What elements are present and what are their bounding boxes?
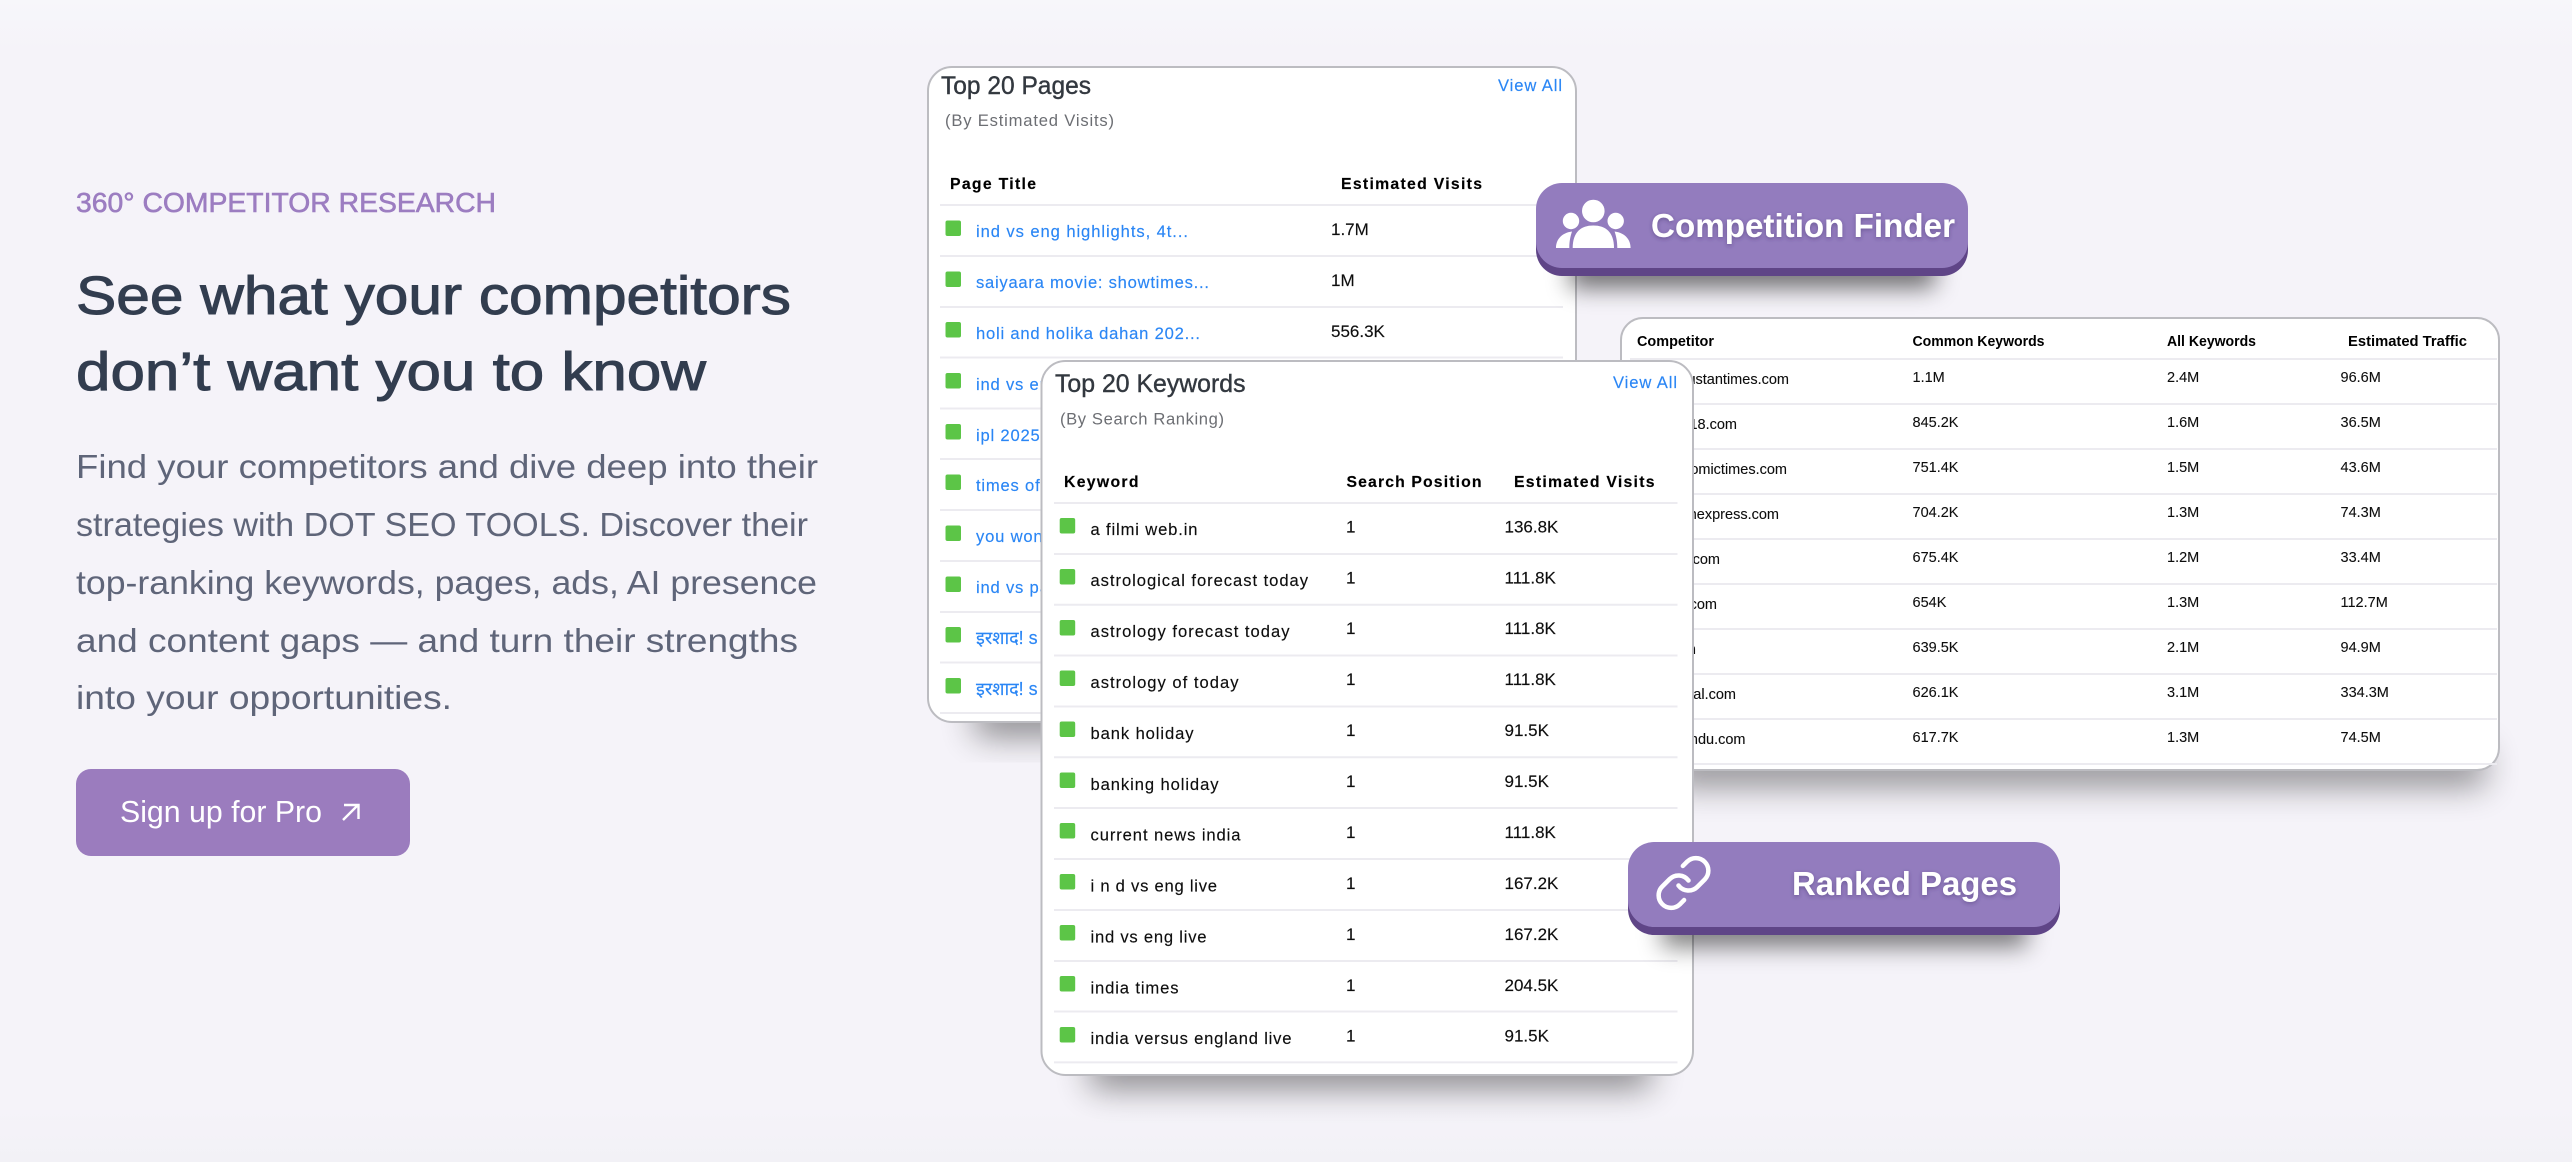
row 1 bbox=[1054, 518, 1678, 554]
row 6: banking holiday bbox=[1090, 775, 1219, 794]
row 3: 111.8K bbox=[1504, 619, 1557, 638]
row 2 bbox=[1054, 568, 1678, 605]
badge: ranked pages bbox=[1628, 842, 2060, 947]
row 2: saiyaara movie: showtimes... bbox=[976, 273, 1209, 292]
row 2: astrological forecast today bbox=[1090, 571, 1309, 590]
row 4: 111.8K bbox=[1504, 670, 1557, 689]
row 10: इरशाद! s bbox=[976, 679, 1038, 699]
row 11: 91.5K bbox=[1504, 1026, 1550, 1046]
row 1 bbox=[1630, 370, 2497, 404]
icon: people bbox=[1556, 200, 1631, 248]
icon: arrow bbox=[343, 805, 358, 820]
row 5 bbox=[1054, 721, 1678, 757]
row 6: 91.5K bbox=[1504, 772, 1550, 791]
row 2: 1 bbox=[1346, 568, 1355, 588]
badge label: Competition Finder bbox=[1651, 207, 1955, 244]
button: sign up for pro: Sign up for Pro bbox=[120, 794, 322, 829]
table header: Search Position bbox=[1346, 474, 1482, 491]
row 6 bbox=[940, 474, 1563, 510]
row 10 bbox=[940, 678, 1563, 713]
row 4 bbox=[1054, 670, 1678, 706]
row 3: 556.3K bbox=[1331, 322, 1386, 341]
heading: See what your competitors bbox=[76, 266, 791, 326]
row 11: 1 bbox=[1346, 1026, 1355, 1046]
heading bbox=[76, 266, 791, 402]
badge base bbox=[1628, 850, 2060, 935]
table header bbox=[940, 176, 1563, 205]
row 2: 1.6M bbox=[2167, 415, 2199, 431]
table header: Estimated Visits bbox=[1341, 176, 1482, 193]
row 9: ind vs eng live bbox=[1090, 928, 1206, 946]
row 3: astrology forecast today bbox=[1090, 622, 1290, 641]
body paragraph: strategies with DOT SEO TOOLS. Discover their bbox=[76, 506, 808, 543]
row 2: news18.com bbox=[1656, 417, 1737, 433]
row 6: 112.7M bbox=[2340, 595, 2388, 611]
row 9: 167.2K bbox=[1504, 925, 1559, 944]
body paragraph: and content gaps — and turn their strengths bbox=[76, 622, 798, 659]
row 1 bbox=[940, 220, 1563, 256]
row 4: 704.2K bbox=[1912, 505, 1959, 521]
row 3 bbox=[1630, 460, 2497, 494]
row 9 bbox=[1054, 925, 1678, 961]
row 9: thehindu.com bbox=[1658, 732, 1746, 748]
panel shadow bbox=[1670, 748, 2485, 786]
body paragraph: into your opportunities. bbox=[76, 679, 452, 716]
row 6: 1 bbox=[1346, 772, 1355, 791]
row 5: .com bbox=[1689, 552, 1720, 568]
body paragraph bbox=[76, 448, 818, 716]
body paragraph: Find your competitors and dive deep into their bbox=[76, 448, 818, 485]
row 8 bbox=[1054, 874, 1678, 910]
row 10: 1 bbox=[1346, 976, 1355, 995]
row 5: 675.4K bbox=[1912, 550, 1959, 566]
row 4: 74.3M bbox=[2340, 505, 2381, 521]
row 7: 639.5K bbox=[1912, 640, 1959, 656]
row 4: ind vs eng bbox=[976, 375, 1060, 394]
heading: don’t want you to know bbox=[76, 342, 707, 402]
row 5: ipl 2025 bbox=[976, 426, 1041, 445]
row 3 bbox=[1054, 619, 1678, 656]
row 6: times of bbox=[976, 476, 1040, 495]
panel card bbox=[1042, 361, 1693, 1075]
body paragraph: top-ranking keywords, pages, ads, AI presence bbox=[76, 564, 817, 601]
row 8: i n d vs eng live bbox=[1090, 876, 1217, 896]
row 6: 654K bbox=[1912, 595, 1947, 611]
row 2 bbox=[940, 271, 1563, 307]
subtitle: (By Estimated Visits) bbox=[945, 111, 1114, 130]
row 1: 136.8K bbox=[1504, 518, 1559, 536]
button: sign up for pro bbox=[76, 769, 410, 856]
panel shadow bbox=[975, 698, 1565, 736]
row 3 bbox=[940, 322, 1563, 358]
row 6: 1.3M bbox=[2167, 595, 2199, 611]
table header: Page Title bbox=[950, 176, 1036, 193]
row 5: 1 bbox=[1346, 721, 1355, 740]
panel: top 20 keywords bbox=[1042, 361, 1693, 1088]
row 7 bbox=[1630, 640, 2497, 674]
row 9: इरशाद! s bbox=[976, 628, 1038, 648]
row 1: 1.7M bbox=[1331, 220, 1369, 239]
row 9: 1 bbox=[1346, 925, 1355, 944]
row 9: 1.3M bbox=[2167, 730, 2199, 746]
badge: competition finder bbox=[1536, 183, 1968, 288]
panel card bbox=[1621, 318, 2499, 770]
table header: Keyword bbox=[1064, 474, 1138, 491]
row 8 bbox=[940, 576, 1563, 612]
row 7: 2.1M bbox=[2167, 640, 2199, 656]
row 2: 845.2K bbox=[1912, 415, 1959, 431]
badge label: Ranked Pages bbox=[1792, 865, 2017, 902]
row 1: 1 bbox=[1346, 518, 1355, 536]
badge base bbox=[1536, 191, 1968, 276]
row 2 bbox=[1630, 415, 2497, 449]
badge face bbox=[1536, 183, 1968, 268]
panel: top 20 pages bbox=[928, 67, 1576, 736]
row 5 bbox=[1630, 550, 2497, 584]
row 11 bbox=[1054, 1026, 1678, 1062]
row 9: 617.7K bbox=[1912, 730, 1959, 746]
row 5: 1.2M bbox=[2167, 550, 2199, 566]
table header bbox=[1054, 474, 1678, 503]
row 3: 1.5M bbox=[2167, 460, 2199, 476]
row 10 bbox=[1054, 976, 1678, 1012]
row 7: current news india bbox=[1090, 826, 1241, 844]
row 1: 1.1M bbox=[1912, 370, 1945, 386]
row 1: a filmi web.in bbox=[1090, 520, 1198, 539]
table header: Common Keywords bbox=[1912, 334, 2044, 350]
row 9 bbox=[940, 627, 1563, 662]
table header: All Keywords bbox=[2167, 334, 2256, 350]
row 4 bbox=[940, 373, 1563, 408]
row 3: 43.6M bbox=[2340, 460, 2381, 476]
row 3: economictimes.com bbox=[1659, 462, 1787, 478]
row 10: 204.5K bbox=[1504, 976, 1559, 995]
badge shadow bbox=[1570, 254, 1935, 288]
row 8: 626.1K bbox=[1912, 685, 1959, 701]
row 5: 91.5K bbox=[1504, 721, 1550, 740]
row 6 bbox=[1054, 772, 1678, 808]
row 7: 1 bbox=[1346, 823, 1355, 842]
row 1: ind vs eng highlights, 4t... bbox=[976, 222, 1188, 241]
badge shadow bbox=[1662, 913, 2027, 947]
row 1: 96.6M bbox=[2340, 370, 2381, 386]
subtitle: (By Search Ranking) bbox=[1060, 410, 1224, 428]
row 7: 94.9M bbox=[2340, 640, 2381, 656]
row 9 bbox=[1630, 730, 2497, 764]
eyebrow: 360° COMPETITOR RESEARCH bbox=[76, 187, 496, 218]
row 8: ind vs pak bbox=[976, 578, 1059, 597]
row 7: you won bbox=[976, 527, 1043, 546]
row 1: 2.4M bbox=[2167, 370, 2199, 386]
panel shadow bbox=[1090, 1048, 1650, 1088]
row 9: 74.5M bbox=[2340, 730, 2381, 746]
row 10: india times bbox=[1090, 978, 1178, 998]
row 5: bank holiday bbox=[1090, 724, 1194, 743]
row 4: indianexpress.com bbox=[1658, 507, 1779, 523]
row 8: 167.2K bbox=[1504, 874, 1559, 893]
row 3: 751.4K bbox=[1912, 460, 1959, 476]
row 3: holi and holika dahan 202... bbox=[976, 324, 1200, 343]
view all link: View All bbox=[1613, 373, 1677, 392]
row 6 bbox=[1630, 595, 2497, 629]
icon: chain link bbox=[1659, 858, 1708, 908]
left text column bbox=[76, 187, 818, 856]
row 1: hindustantimes.com bbox=[1660, 372, 1789, 388]
panel card bbox=[928, 67, 1576, 722]
row 5 bbox=[940, 424, 1563, 459]
row 2: 1M bbox=[1331, 271, 1355, 290]
row 8: 334.3M bbox=[2340, 685, 2389, 701]
row 4: astrology of today bbox=[1090, 673, 1239, 692]
row 7: .in bbox=[1681, 642, 1696, 658]
row 3: 1 bbox=[1346, 619, 1355, 638]
view all link: View All bbox=[1498, 76, 1562, 95]
row 7: 111.8K bbox=[1504, 823, 1557, 842]
panel: competitors table bbox=[1621, 318, 2499, 786]
row 2: 36.5M bbox=[2340, 415, 2381, 431]
table header bbox=[1630, 334, 2497, 359]
row 8: 3.1M bbox=[2167, 685, 2199, 701]
panel title: Top 20 Keywords bbox=[1055, 370, 1246, 398]
row 5: 33.4M bbox=[2340, 550, 2381, 566]
row 4: 1.3M bbox=[2167, 505, 2199, 521]
table header: Competitor bbox=[1637, 334, 1714, 350]
row 2: 111.8K bbox=[1504, 568, 1557, 588]
table header: Estimated Traffic bbox=[2348, 334, 2467, 350]
panel title: Top 20 Pages bbox=[941, 72, 1091, 100]
row 8: dial.com bbox=[1682, 687, 1736, 703]
row 7 bbox=[940, 526, 1563, 561]
table header: Estimated Visits bbox=[1514, 474, 1655, 491]
badge face bbox=[1628, 842, 2060, 927]
row 11: india versus england live bbox=[1090, 1029, 1292, 1048]
row 6: .com bbox=[1686, 597, 1717, 613]
row 7 bbox=[1054, 823, 1678, 859]
row 8: 1 bbox=[1346, 874, 1355, 893]
row 8 bbox=[1630, 685, 2497, 719]
row 4 bbox=[1630, 505, 2497, 539]
row 4: 1 bbox=[1346, 670, 1355, 689]
